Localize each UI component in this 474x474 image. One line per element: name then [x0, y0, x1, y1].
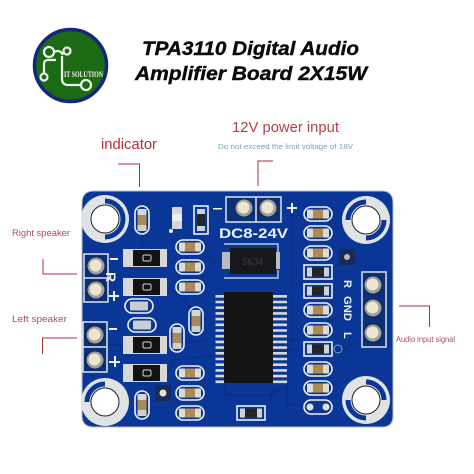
- connector: power input: [226, 197, 281, 222]
- silkscreen markings: R: [103, 272, 119, 282]
- right component column: [237, 207, 332, 420]
- dark test points: [155, 249, 355, 401]
- label: indicator: indicator: [101, 137, 157, 153]
- silkscreen markings: L: [341, 332, 353, 339]
- circuit board: [81, 191, 393, 427]
- power diode SK34: [222, 244, 280, 278]
- title: [134, 39, 369, 85]
- connector: right speaker: [84, 254, 108, 302]
- logo: IT Solution: [34, 30, 106, 102]
- indicator LED: [169, 207, 182, 233]
- label: Right speaker: Right speaker: [12, 228, 70, 238]
- callout lines: [42, 161, 430, 354]
- left component column: [123, 206, 204, 420]
- silkscreen markings: DC8-24V: [219, 225, 289, 241]
- silkscreen markings: R: [341, 280, 353, 288]
- silkscreen markings: GND: [341, 296, 353, 321]
- title: TPA3110 Digital Audio: [142, 39, 359, 60]
- label: 12V power input: 12V power input: [232, 120, 339, 136]
- label: Audio input signal: Audio input signal: [396, 335, 455, 344]
- power diode SK34: SK34: [242, 257, 263, 268]
- resistor: top: [194, 206, 208, 234]
- connector: left speaker: [83, 322, 107, 372]
- connector: audio input: [362, 272, 386, 347]
- silkscreen markings: [103, 203, 353, 367]
- label: Left speaker: Left speaker: [12, 314, 67, 324]
- mounting holes: [81, 195, 390, 426]
- title: Amplifier Board 2X15W: [134, 64, 369, 85]
- board substrate: [82, 191, 393, 427]
- logo wordmark: IT SOLUTION: [64, 69, 104, 79]
- note: voltage limit: Do not exceed the limit voltage of 18V: [218, 142, 353, 151]
- copper traces: [110, 215, 390, 405]
- amplifier IC with pins: [220, 292, 280, 384]
